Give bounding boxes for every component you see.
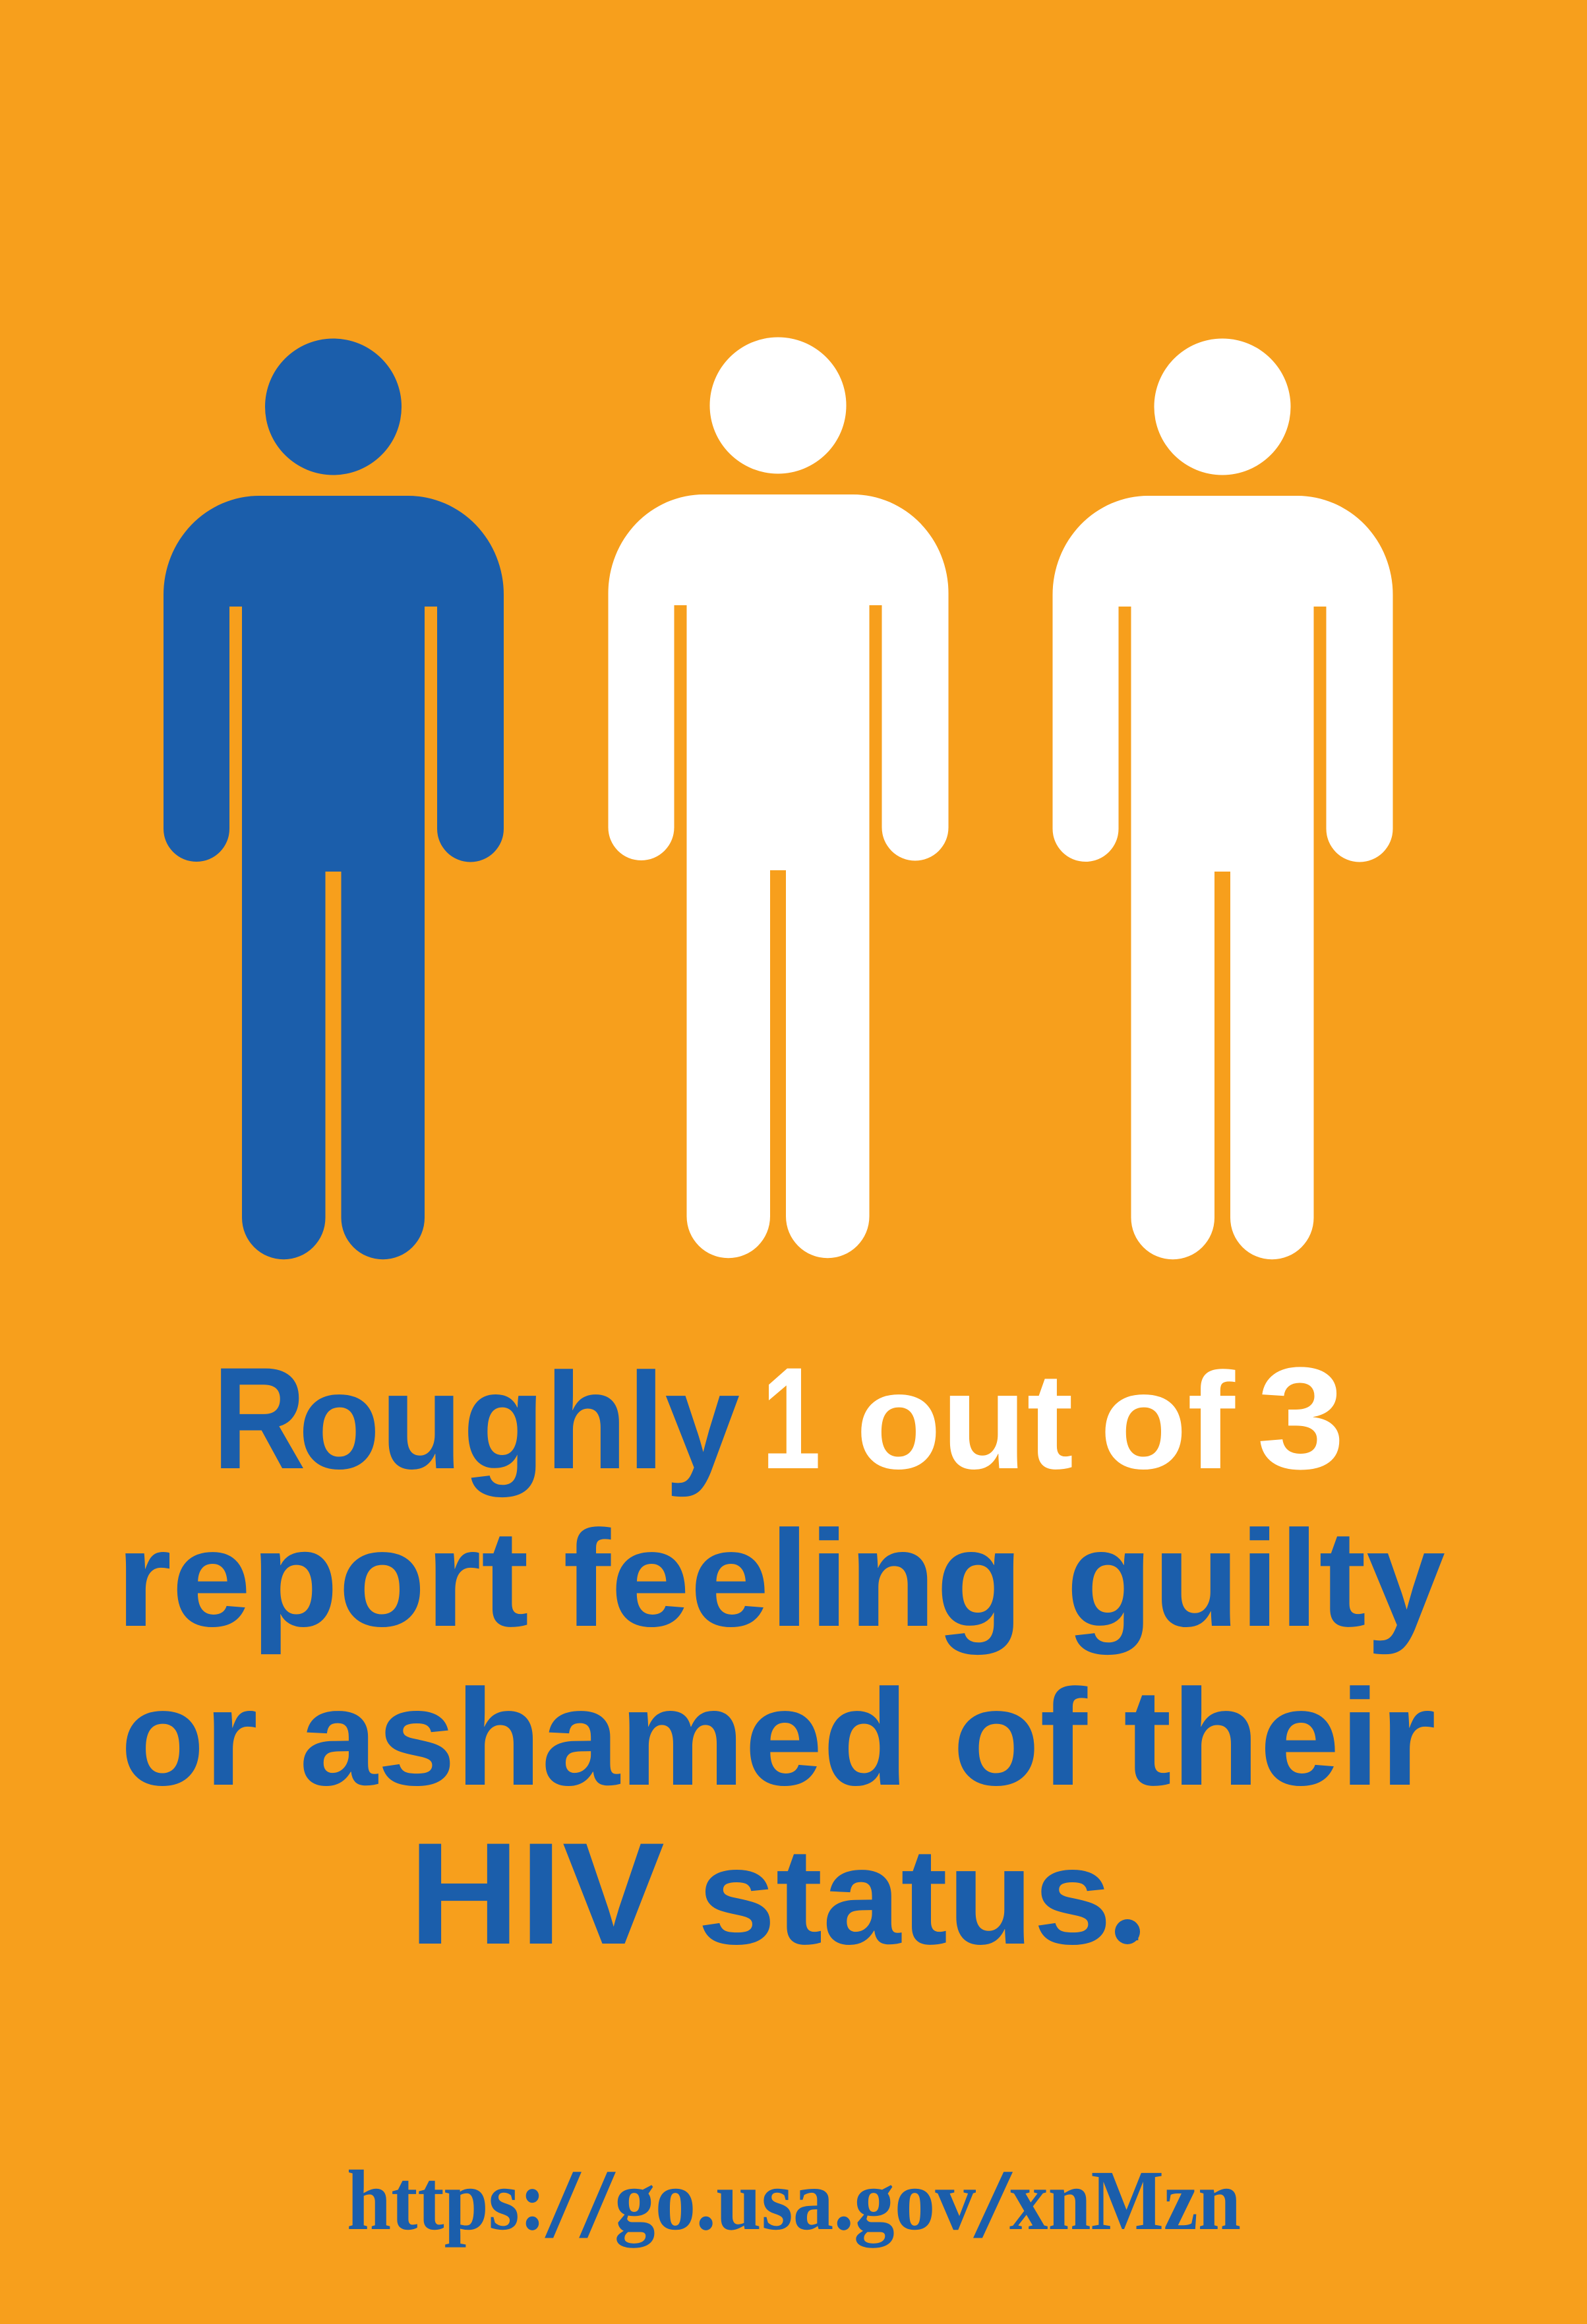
source url: go.usa.gov (614, 2153, 976, 2248)
headline line 4: HIV (409, 1812, 665, 1975)
headline line 1: oughly (298, 1345, 740, 1498)
headline line 1: out (856, 1345, 1073, 1498)
icon: white person, middle (608, 338, 948, 1258)
headline line 1: 1 (762, 1337, 821, 1499)
icon: blue person (164, 339, 504, 1259)
headline line 2: feeling (563, 1503, 1023, 1655)
headline line 1: R (212, 1337, 306, 1499)
headline line 4 (409, 1812, 1145, 1975)
source url (347, 2149, 1241, 2259)
headline line 3: their (1123, 1661, 1436, 1814)
source url: xnMzn (1009, 2153, 1241, 2248)
headline statement (116, 1337, 1445, 1975)
source url: https: (347, 2153, 546, 2248)
source url: / (973, 2149, 1013, 2259)
headline line 2: guilty (1066, 1503, 1445, 1655)
headline line 4: status (698, 1820, 1112, 1973)
headline line 3: ashamed (299, 1661, 909, 1814)
headline line 4: . (1118, 1851, 1145, 1961)
headline line 1 (212, 1337, 1345, 1499)
headline line 2: report (116, 1503, 529, 1655)
headline line 3: of (953, 1661, 1088, 1814)
headline line 3 (121, 1661, 1436, 1814)
pictogram row: three people (164, 338, 1392, 1259)
headline line 3: or (121, 1661, 258, 1814)
source url: // (545, 2149, 616, 2259)
headline line 2 (116, 1503, 1445, 1655)
icon: white person, right (1052, 339, 1392, 1259)
headline line 1: of (1100, 1345, 1236, 1498)
headline line 1: 3 (1257, 1337, 1345, 1499)
